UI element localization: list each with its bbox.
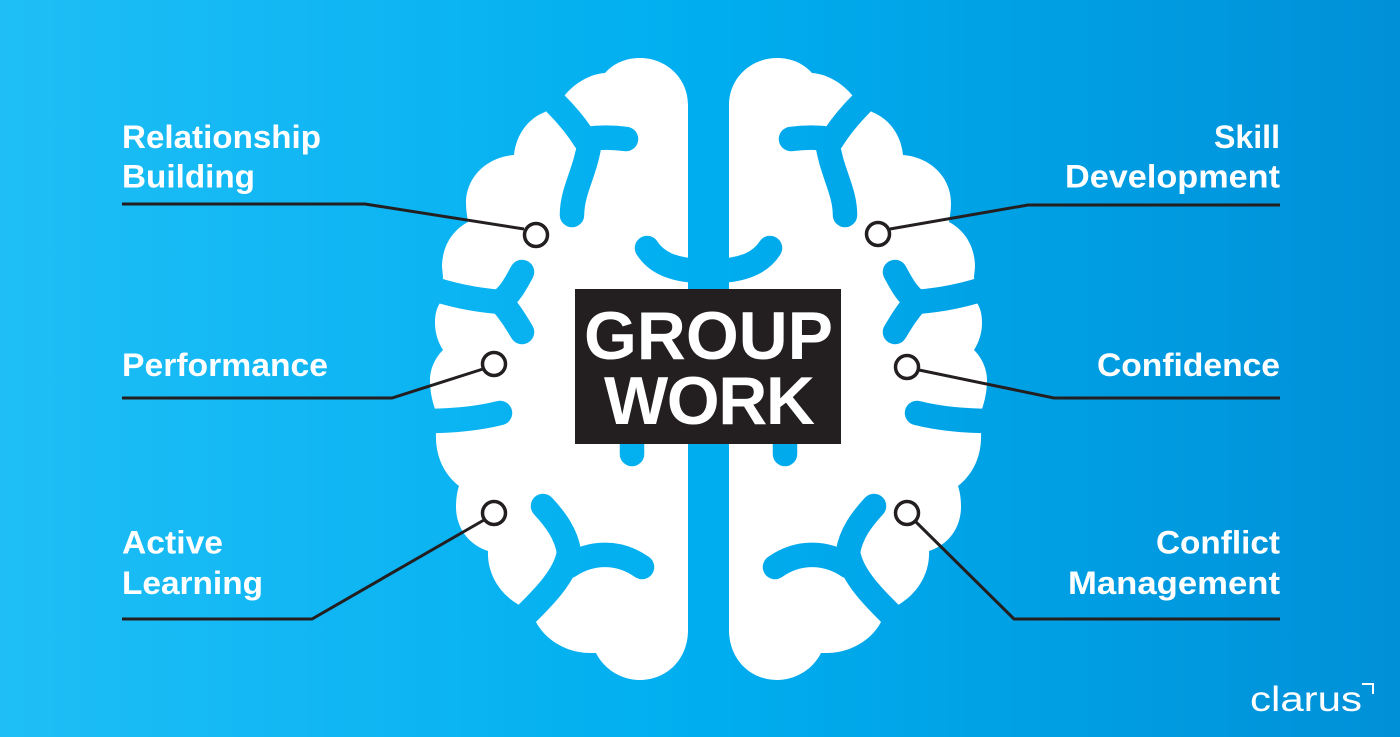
callout: conflict management: Management	[1068, 565, 1280, 601]
callout: skill development: Development	[1065, 158, 1280, 194]
callout: confidence	[896, 347, 1280, 398]
callout: conflict management: Conflict	[1156, 524, 1280, 560]
callout: active learning: Learning	[122, 565, 263, 601]
callout: active learning: Active	[122, 524, 223, 560]
callout: confidence: Confidence	[1097, 347, 1280, 383]
callout: active learning	[122, 502, 506, 619]
callout: relationship building: Relationship	[122, 119, 321, 155]
callout: performance	[122, 347, 506, 398]
callout: conflict management	[896, 502, 1280, 619]
callout: skill development	[866, 119, 1280, 246]
right hemisphere	[717, 58, 992, 680]
callout: relationship building: Building	[122, 158, 255, 194]
callout: skill development: Skill	[1214, 119, 1280, 155]
callout: performance: Performance	[122, 347, 328, 383]
center title: group work: WORK	[604, 363, 815, 439]
center title: group work	[575, 289, 841, 444]
brain illustration	[425, 58, 992, 680]
logo: clarus: clarus	[1250, 680, 1362, 719]
callout: relationship building	[122, 119, 548, 246]
left hemisphere	[425, 58, 700, 680]
center title: group work: GROUP	[584, 298, 833, 374]
